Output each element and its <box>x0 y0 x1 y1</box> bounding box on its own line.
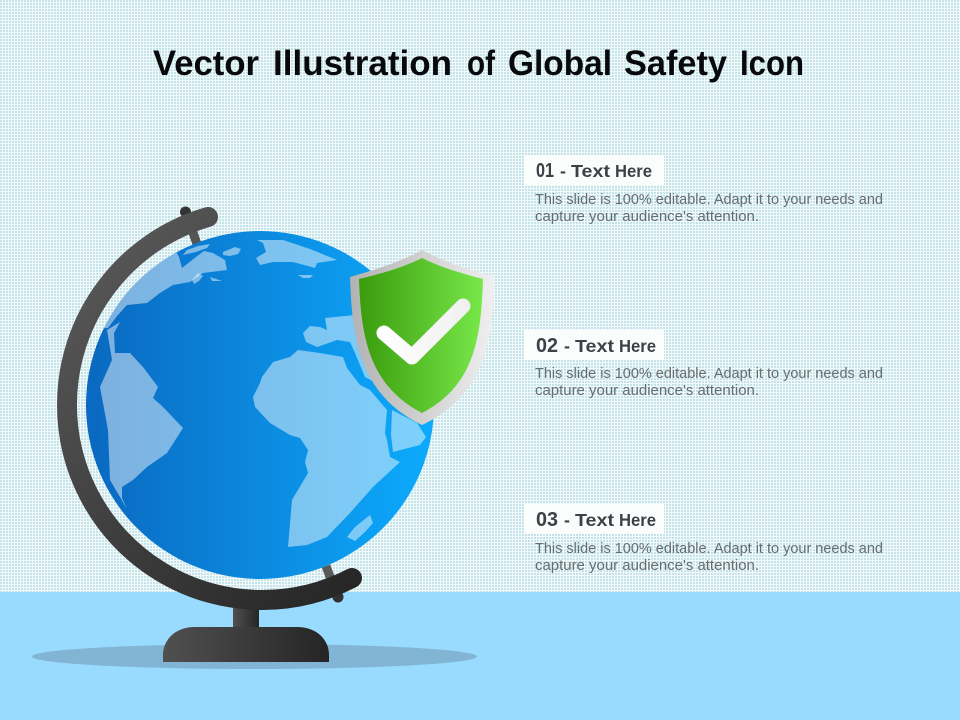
continent: north-west landmass <box>104 251 227 328</box>
label 03: - <box>564 510 570 530</box>
label 02: - <box>564 336 570 356</box>
top pin <box>180 206 197 244</box>
globe sphere with continents <box>60 231 434 579</box>
title: Vector <box>153 43 259 83</box>
label 03: Text <box>575 510 614 530</box>
continent: western landmass <box>100 322 183 509</box>
label 03: Here <box>619 510 656 530</box>
shield rim <box>350 250 495 425</box>
label 01: Text <box>571 161 610 181</box>
continent: southern island <box>347 515 373 541</box>
shield icon <box>350 250 495 425</box>
title: Illustration <box>273 43 452 83</box>
stand base <box>163 627 329 662</box>
stand arc <box>67 217 352 600</box>
description 03: This slide is 100% editable. Adapt it to your needs and <box>535 541 883 557</box>
islands <box>223 247 241 256</box>
label 03: 03 <box>536 509 558 531</box>
description 02: This slide is 100% editable. Adapt it to your needs and <box>535 366 883 382</box>
continent: southern landmass <box>253 350 400 547</box>
title: Global <box>508 43 612 83</box>
item 03 <box>524 504 887 574</box>
label 01: Here <box>615 161 652 181</box>
label 01 <box>524 155 664 185</box>
title: Safety <box>624 43 727 83</box>
continent: northern landmass right <box>256 240 337 268</box>
label 01: - <box>560 161 566 181</box>
description 02: capture your audience's attention. <box>535 383 759 399</box>
label 01: 01 <box>536 160 554 182</box>
continent: eastern island <box>391 410 426 452</box>
label 02: Here <box>619 336 656 356</box>
bottom pin <box>326 566 344 602</box>
label 03 <box>524 504 664 534</box>
label 02: 02 <box>536 335 558 357</box>
continent: north strip <box>183 244 210 255</box>
label 02: Text <box>575 336 614 356</box>
ground shadow <box>32 644 477 669</box>
stand post <box>233 606 259 631</box>
title: Icon <box>740 43 804 83</box>
globe illustration <box>32 206 477 669</box>
item 01 <box>524 155 887 225</box>
floor band <box>0 592 960 720</box>
shield face <box>359 258 483 413</box>
item 02 <box>524 330 887 399</box>
description 03: capture your audience's attention. <box>535 558 759 574</box>
description 01: capture your audience's attention. <box>535 209 759 225</box>
label 02 <box>524 330 664 360</box>
continent: upper right <box>303 315 372 381</box>
description 01: This slide is 100% editable. Adapt it to your needs and <box>535 192 883 208</box>
title: of <box>467 43 495 83</box>
check mark <box>384 306 463 357</box>
